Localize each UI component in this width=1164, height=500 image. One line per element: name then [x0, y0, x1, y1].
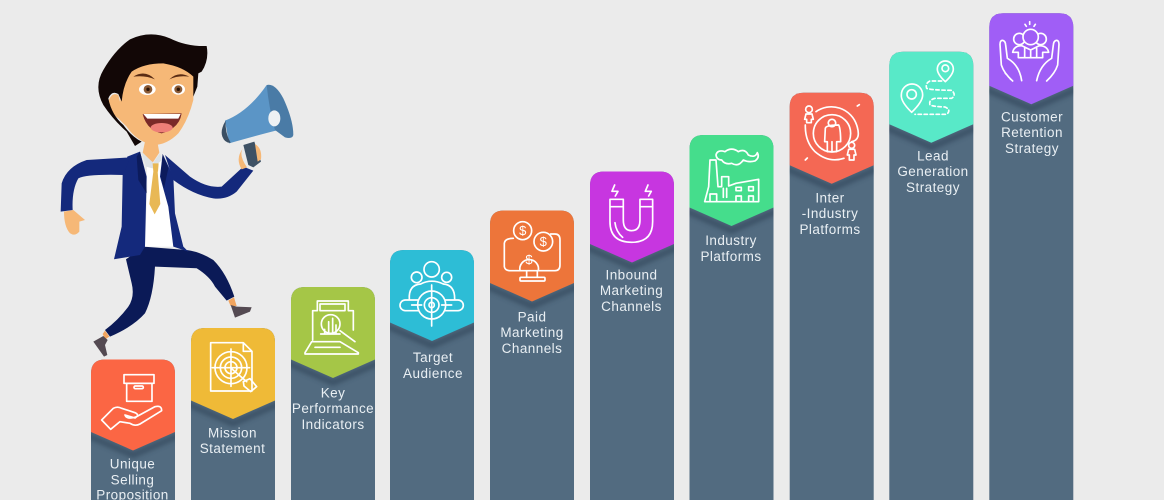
character head: [98, 34, 207, 146]
step 5: Paid Marketing Channels: $: [525, 252, 533, 267]
step 9: Lead Generation Strategy: [889, 52, 974, 500]
character body: [61, 142, 253, 357]
step 4: Target Audience: [390, 250, 474, 500]
step 10: Customer Retention Strategy: Retention: [1001, 125, 1063, 140]
step 7: Industry Platforms: [690, 135, 774, 500]
step 5: Paid Marketing Channels: Channels: [502, 341, 562, 356]
step 2: Mission Statement: [191, 328, 275, 500]
step 8: Inter-Industry Platforms: [790, 92, 874, 500]
step 3: Key Performance Indicators: Key: [321, 386, 345, 400]
step 2: Mission Statement: Mission: [208, 426, 257, 440]
step 9: Lead Generation Strategy: Strategy: [906, 180, 960, 195]
step 6: Inbound Marketing Channels: Channels: [601, 299, 662, 314]
step 10: Customer Retention Strategy: Strategy: [1005, 141, 1059, 156]
character: businessman with megaphone: [61, 34, 293, 357]
step 1: Unique Selling Proposition: Selling: [111, 472, 154, 488]
step 5: Paid Marketing Channels: Paid: [518, 310, 546, 324]
icon: megaphone: [222, 85, 293, 169]
step 3: Key Performance Indicators: Performance: [292, 401, 374, 416]
step 7: Industry Platforms: Platforms: [700, 249, 762, 264]
step 1: Unique Selling Proposition: [91, 360, 175, 500]
step 5: Paid Marketing Channels: [490, 210, 574, 500]
step 6: Inbound Marketing Channels: Marketing: [600, 283, 663, 298]
step 5: Paid Marketing Channels: $: [540, 234, 548, 249]
step 8: Inter-Industry Platforms: Inter: [815, 190, 845, 206]
step 8: Inter-Industry Platforms: Platforms: [799, 222, 861, 237]
step 4: Target Audience: Audience: [403, 366, 463, 381]
step 5: Paid Marketing Channels: Marketing: [500, 325, 564, 340]
step 6: Inbound Marketing Channels: Inbound: [606, 268, 657, 282]
step 1: Unique Selling Proposition: Unique: [110, 456, 155, 472]
step 4: Target Audience: Target: [413, 350, 453, 365]
step 3: Key Performance Indicators: [291, 287, 375, 500]
step 7: Industry Platforms: Industry: [705, 233, 757, 248]
step 3: Key Performance Indicators: Indicators: [301, 417, 365, 432]
step 10: Customer Retention Strategy: [989, 13, 1074, 500]
step 9: Lead Generation Strategy: Lead: [917, 148, 949, 164]
step 2: Mission Statement: Statement: [200, 441, 265, 456]
step 9: Lead Generation Strategy: Generation: [897, 164, 969, 179]
step 8: Inter-Industry Platforms: -Industry: [802, 206, 858, 221]
step 6: Inbound Marketing Channels: [590, 172, 674, 500]
step 10: Customer Retention Strategy: Customer: [1001, 110, 1063, 124]
step 5: Paid Marketing Channels: $: [519, 223, 527, 238]
